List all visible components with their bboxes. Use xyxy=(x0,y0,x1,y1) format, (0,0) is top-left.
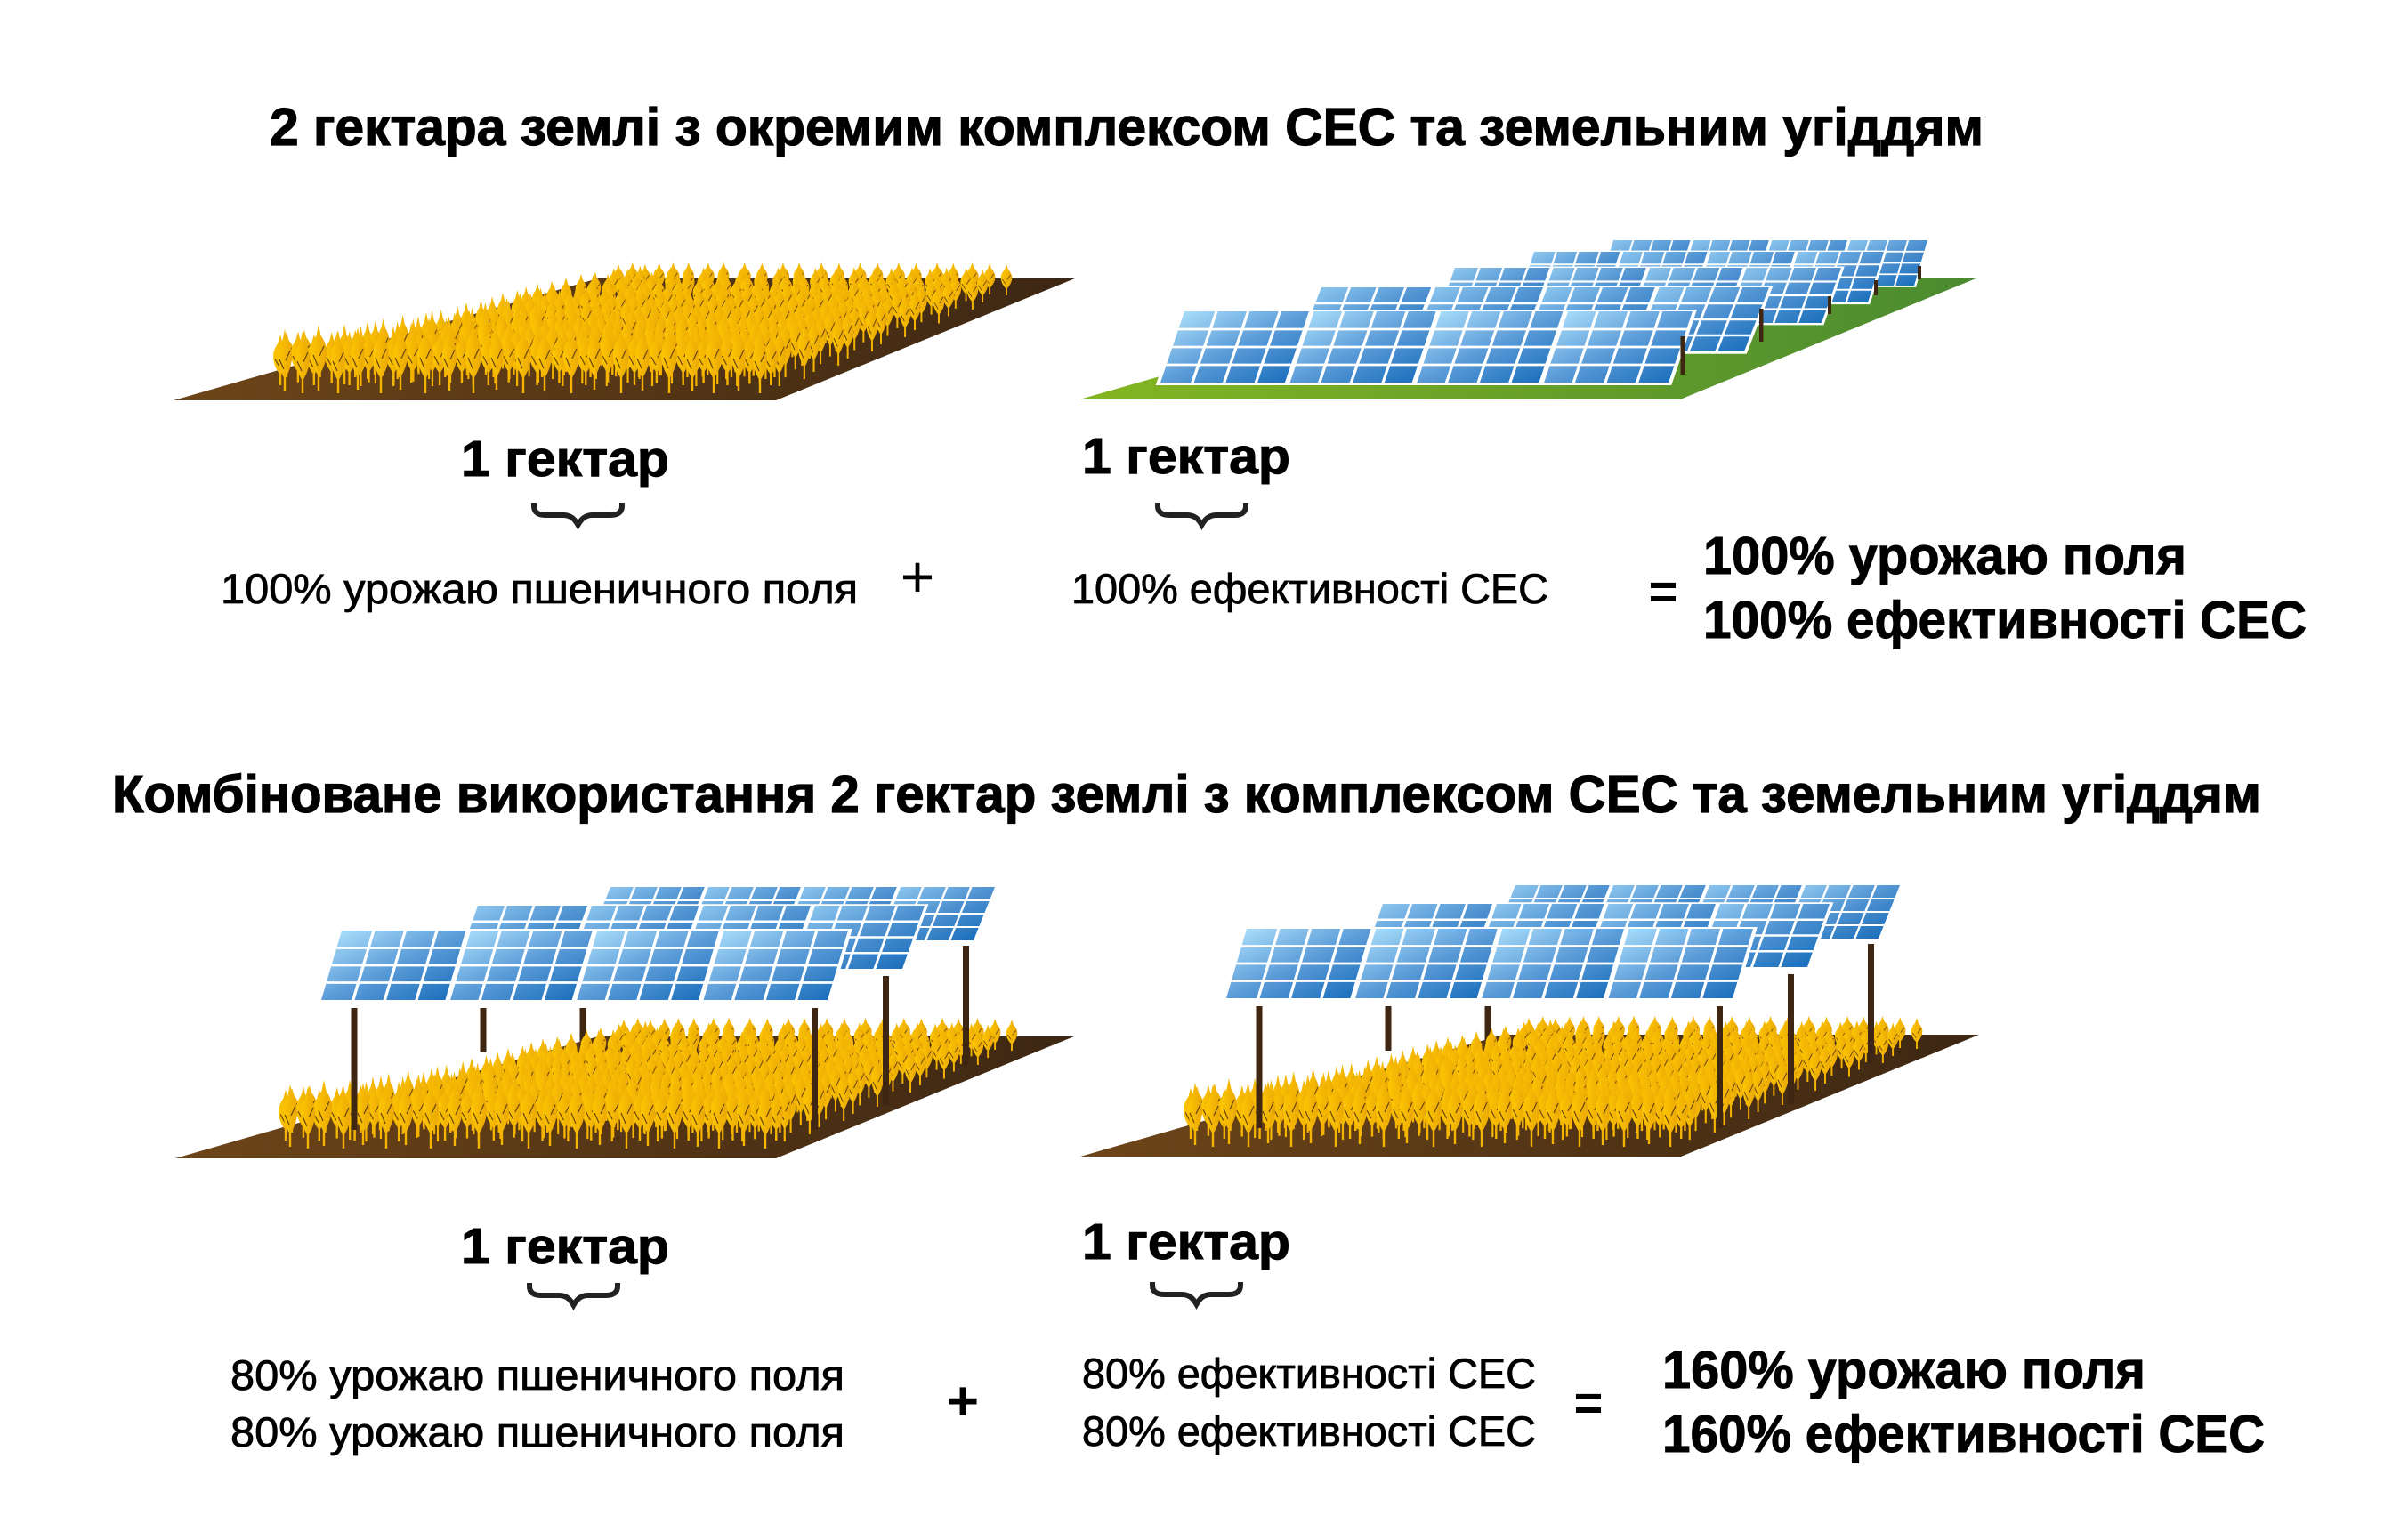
text: wheat yield lines: 80% урожаю пшеничного поля xyxy=(230,1351,844,1399)
grass plot xyxy=(1079,278,1978,399)
result: combined use: 160% урожаю поля xyxy=(1662,1341,2145,1399)
solar array rows xyxy=(1156,239,1930,385)
result: combined use xyxy=(1662,1341,2265,1463)
result: combined use: 160% ефективності СЕС xyxy=(1662,1405,2265,1463)
operator: plus: + xyxy=(901,544,934,609)
text: wheat yield lines xyxy=(230,1351,844,1455)
result: separate use xyxy=(1703,527,2307,649)
text: wheat yield: 100% урожаю пшеничного поля xyxy=(221,565,858,612)
label: 1 hectare right: 1 гектар xyxy=(1082,1214,1290,1270)
operator: equals: = xyxy=(1574,1375,1603,1431)
title: combined land use: Комбіноване використання 2 гектар землі з комплексом СЕС та земельним угіддям xyxy=(112,765,2261,824)
wheat crop xyxy=(273,262,1012,393)
brace: solar xyxy=(1158,503,1246,525)
operator: bold plus: + xyxy=(947,1371,979,1432)
panel: combined wheat and solar, second hectare xyxy=(1080,884,1979,1157)
label: 1 hectare solar: 1 гектар xyxy=(1082,428,1290,485)
brace: wheat xyxy=(534,503,622,525)
text: solar efficiency: 100% ефективності СЕС xyxy=(1071,565,1548,612)
brace: left xyxy=(529,1283,618,1305)
text: wheat yield lines: 80% урожаю пшеничного поля xyxy=(230,1408,844,1455)
label: 1 hectare left: 1 гектар xyxy=(461,1218,669,1275)
label: 1 hectare wheat: 1 гектар xyxy=(461,431,669,488)
text: solar efficiency lines: 80% ефективності СЕС xyxy=(1082,1407,1536,1455)
panel: solar plant on grass illustration xyxy=(1079,239,1978,399)
soil plot xyxy=(174,278,1075,400)
operator: equals: = xyxy=(1649,563,1677,619)
panel: wheat field illustration xyxy=(174,262,1075,400)
panel: combined wheat and solar, first hectare xyxy=(175,886,1074,1158)
title: separate land use: 2 гектара землі з окремим комплексом СЕС та земельним угіддям xyxy=(270,98,1984,157)
brace: right xyxy=(1152,1282,1240,1304)
result: separate use: 100% урожаю поля xyxy=(1703,527,2186,585)
result: separate use: 100% ефективності СЕС xyxy=(1703,591,2307,649)
text: solar efficiency lines: 80% ефективності СЕС xyxy=(1082,1350,1536,1397)
text: solar efficiency lines xyxy=(1082,1350,1536,1455)
